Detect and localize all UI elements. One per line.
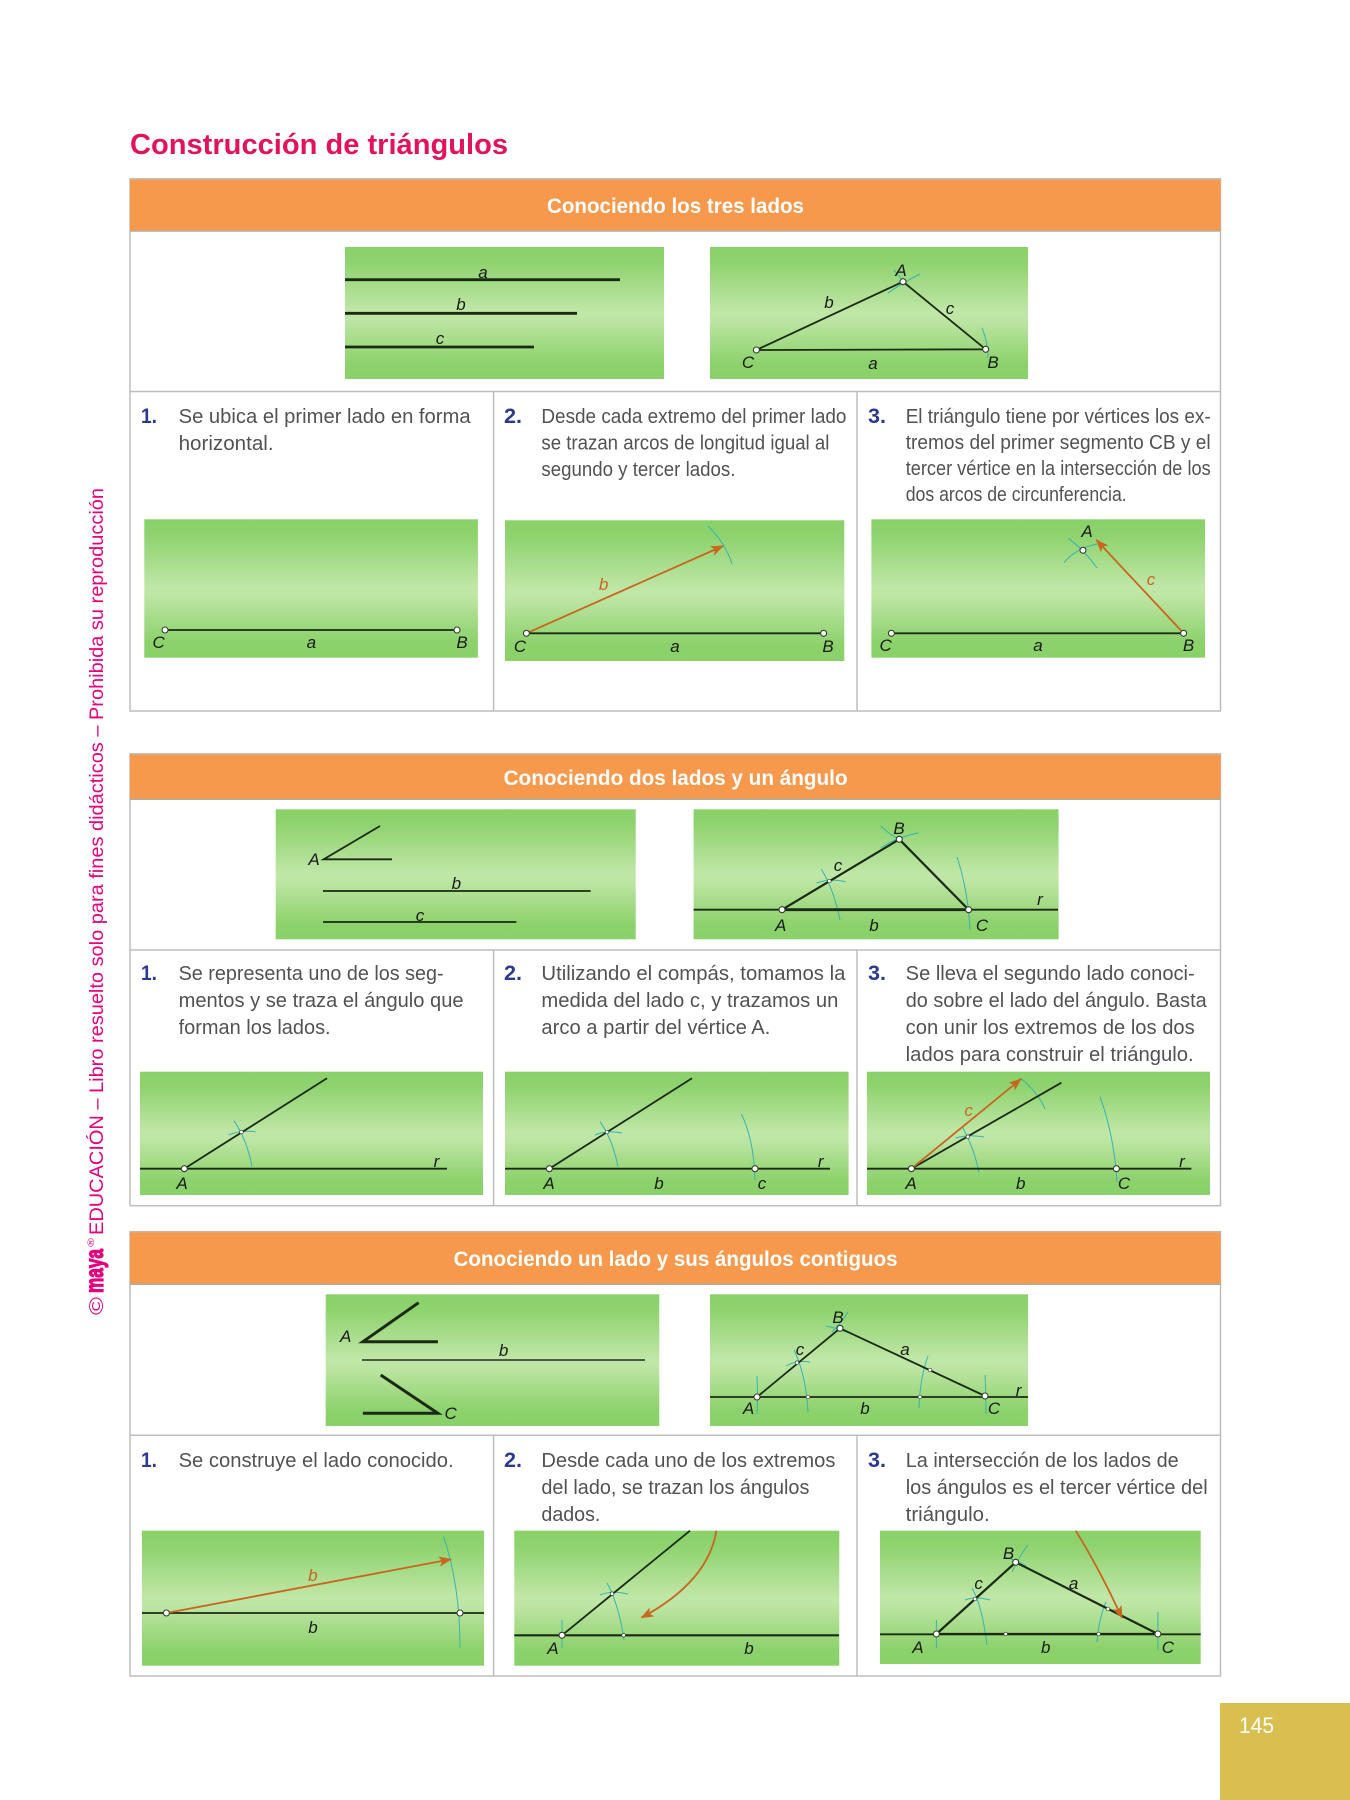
diagram: finished triangle: C xyxy=(742,353,755,372)
diagram: step 1 known side: b xyxy=(308,1618,318,1637)
diagram: step 2 arc from vertex A xyxy=(505,1072,849,1195)
sidebar: copyright text: © xyxy=(87,1297,108,1315)
step 1 text: Se representa uno de los seg- xyxy=(179,963,444,985)
diagram: finished triangle from angles: a xyxy=(900,1340,910,1359)
diagram: finished triangle from angles: c xyxy=(796,1340,805,1359)
heading: conociendo un lado y sus angulos contiguos: Conociendo un lado y sus ángulos contiguos xyxy=(454,1248,898,1271)
diagram: data angle and segments: b xyxy=(452,874,461,893)
diagram: step 3 intersecting arcs xyxy=(871,519,1205,658)
sidebar: copyright text: maya xyxy=(81,1248,109,1293)
diagram: step 3 intersection vertex: c xyxy=(974,1574,983,1593)
step 1 text: forman los lados. xyxy=(179,1017,331,1039)
step 2 text: Desde cada extremo del primer lado xyxy=(541,406,846,428)
step 3 text: con unir los extremos de los dos xyxy=(906,1017,1195,1039)
step 1 text: 1. xyxy=(141,405,157,428)
step 2 text: del lado, se trazan los ángulos xyxy=(541,1477,809,1499)
heading: conociendo los tres lados: Conociendo los tres lados xyxy=(547,195,804,218)
diagram: step 3 intersection vertex: a xyxy=(1069,1574,1078,1593)
diagram: finished triangle: b xyxy=(824,293,834,312)
diagram: step 3 intersecting arcs: c xyxy=(1147,570,1156,589)
diagram: finished triangle ABC: A xyxy=(774,916,786,935)
diagram: step 2 angles traced: b xyxy=(744,1639,754,1658)
page number block: 145 xyxy=(1239,1713,1274,1738)
diagram: data side and angles xyxy=(326,1294,659,1426)
diagram: step 3 second side carried: b xyxy=(1016,1174,1025,1193)
page number block xyxy=(1220,1703,1350,1800)
step 2 text: 2. xyxy=(504,1449,522,1472)
step 1 text: Se construye el lado conocido. xyxy=(179,1450,454,1472)
diagram: step 2 arc with side b: B xyxy=(822,637,834,656)
diagram: step 3 second side carried xyxy=(867,1072,1210,1195)
diagram: data segments a b c: b xyxy=(456,295,466,314)
diagram: step 3 intersection vertex: A xyxy=(911,1638,924,1657)
step 1 text: 1. xyxy=(141,1449,157,1472)
diagram: data angle and segments: c xyxy=(416,906,425,925)
step 3 text: 3. xyxy=(868,962,886,985)
diagram: finished triangle: B xyxy=(987,353,999,372)
heading: conociendo dos lados y un angulo xyxy=(130,754,1220,799)
step 2 text: se trazan arcos de longitud igual al xyxy=(541,432,829,454)
panel frame 1 xyxy=(130,179,1220,711)
diagram: data angle and segments: A xyxy=(307,850,320,869)
panel: conociendo los tres lados xyxy=(130,179,1220,711)
heading: conociendo los tres lados xyxy=(130,179,1220,231)
diagram: finished triangle ABC: b xyxy=(869,916,879,935)
diagram: step 3 intersection vertex: B xyxy=(1003,1544,1014,1563)
diagram: step 2 arc with side b: b xyxy=(599,575,608,594)
diagram: step 3 intersection vertex: b xyxy=(1041,1638,1050,1657)
diagram: finished triangle ABC: c xyxy=(834,856,843,875)
step 1 text: Se ubica el primer lado en forma xyxy=(179,406,471,428)
diagram: data segments a b c: c xyxy=(436,329,445,348)
step 3 text xyxy=(868,962,1208,1066)
step 3 text: tercer vértice en la intersección de los xyxy=(906,458,1211,480)
sidebar: copyright text: ® xyxy=(86,1238,96,1247)
diagram: finished triangle: A xyxy=(894,261,907,280)
diagram: finished triangle: c xyxy=(946,299,955,318)
diagram: step 1 angle on line r xyxy=(140,1072,483,1195)
diagram: step 2 arc from vertex A: c xyxy=(758,1174,767,1193)
diagram: step 2 arc with side b xyxy=(505,520,844,661)
step 2 text: medida del lado c, y trazamos un xyxy=(541,990,838,1012)
diagram: data segments a b c: a xyxy=(478,263,488,282)
diagram: data angle and segments xyxy=(276,809,636,939)
diagram: finished triangle from angles xyxy=(710,1294,1028,1426)
step 1 text: 1. xyxy=(141,962,157,985)
step 2 text: segundo y tercer lados. xyxy=(541,459,735,481)
diagram: step 1 horizontal side: B xyxy=(456,633,468,652)
step 3 text: lados para construir el triángulo. xyxy=(906,1044,1194,1066)
diagram: step 1 known side xyxy=(142,1531,484,1666)
step 1 text xyxy=(141,962,464,1039)
diagram: step 3 intersecting arcs: A xyxy=(1080,522,1093,541)
step 3 text: do sobre el lado del ángulo. Basta xyxy=(906,990,1208,1012)
diagram: step 3 second side carried: c xyxy=(964,1101,973,1120)
diagram: step 2 angles traced: A xyxy=(546,1639,559,1658)
step 3 text: tremos del primer segmento CB y el xyxy=(906,432,1211,454)
diagram: finished triangle from angles: r xyxy=(1016,1381,1023,1400)
diagram: step 3 intersecting arcs: C xyxy=(880,636,893,655)
step 2 text: Utilizando el compás, tomamos la xyxy=(541,963,846,985)
step 2 text: dados. xyxy=(541,1504,600,1526)
diagram: finished triangle from angles: B xyxy=(832,1308,844,1327)
step 2 text: 2. xyxy=(504,405,522,428)
diagram: step 2 angles traced xyxy=(514,1531,839,1666)
panel: conociendo un lado y sus angulos contiguos xyxy=(130,1232,1220,1676)
diagram: finished triangle ABC: B xyxy=(893,819,905,838)
diagram: data side and angles: C xyxy=(445,1404,458,1423)
step 3 text: 3. xyxy=(868,1449,886,1472)
diagram: step 1 horizontal side: C xyxy=(152,633,165,652)
diagram: step 1 horizontal side xyxy=(144,519,478,658)
diagram: step 3 second side carried: A xyxy=(904,1174,917,1193)
panel frame 2 xyxy=(130,754,1220,1206)
step 2 text: Desde cada uno de los extremos xyxy=(541,1450,835,1472)
diagram: data side and angles: b xyxy=(499,1341,508,1360)
sidebar: copyright text: EDUCACIÓN – Libro resuelto solo para fines didácticos – Prohibida su reproducción xyxy=(86,488,108,1235)
step 3 text: dos arcos de circunferencia. xyxy=(906,484,1127,506)
diagram: step 3 second side carried: C xyxy=(1118,1174,1131,1193)
diagram: finished triangle: a xyxy=(868,354,878,373)
heading: conociendo dos lados y un angulo: Conociendo dos lados y un ángulo xyxy=(504,767,848,790)
panel frame 3 xyxy=(130,1232,1220,1676)
diagram: step 1 angle on line r: r xyxy=(434,1152,441,1171)
step 3 text xyxy=(868,405,1211,506)
diagram: finished triangle ABC: r xyxy=(1037,890,1044,909)
step 2 text: arco a partir del vértice A. xyxy=(541,1017,770,1039)
diagram: step 1 angle on line r: A xyxy=(175,1174,188,1193)
step 2 text xyxy=(504,1449,835,1526)
step 1 text: mentos y se traza el ángulo que xyxy=(179,990,464,1012)
diagram: data side and angles: A xyxy=(339,1327,351,1346)
panel: conociendo dos lados y un angulo xyxy=(130,754,1220,1206)
diagram: step 2 arc from vertex A: A xyxy=(542,1174,555,1193)
diagram: finished triangle xyxy=(710,247,1028,379)
step 2 text xyxy=(504,962,846,1039)
step 1 text xyxy=(141,405,471,455)
diagram: finished triangle from angles: b xyxy=(860,1399,870,1418)
diagram: step 3 intersection vertex xyxy=(880,1531,1201,1664)
step 2 text: 2. xyxy=(504,962,522,985)
title: Construcción de triángulos xyxy=(130,129,508,161)
heading: conociendo un lado y sus angulos contiguos xyxy=(130,1232,1220,1284)
step 2 text xyxy=(504,405,846,481)
step 3 text: La intersección de los lados de xyxy=(906,1450,1179,1472)
diagram: step 2 arc with side b: C xyxy=(514,637,527,656)
diagram: step 3 intersection vertex: C xyxy=(1162,1638,1175,1657)
diagram: data segments a b c xyxy=(345,247,664,379)
sidebar: copyright text xyxy=(81,488,109,1315)
diagram: finished triangle from angles: A xyxy=(742,1399,754,1418)
step 3 text: los ángulos es el tercer vértice del xyxy=(906,1477,1208,1499)
diagram: finished triangle from angles: C xyxy=(988,1399,1001,1418)
diagram: step 3 second side carried: r xyxy=(1179,1152,1186,1171)
diagram: step 3 intersecting arcs: a xyxy=(1033,636,1043,655)
diagram: step 2 arc with side b: a xyxy=(670,637,680,656)
step 1 text: horizontal. xyxy=(179,433,274,455)
diagram: step 2 arc from vertex A: r xyxy=(818,1152,825,1171)
step 3 text: El triángulo tiene por vértices los ex- xyxy=(906,406,1211,428)
diagram: step 1 known side: b xyxy=(308,1566,318,1585)
step 3 text: 3. xyxy=(868,405,886,428)
diagram: step 3 intersecting arcs: B xyxy=(1183,636,1194,655)
diagram: step 1 horizontal side: a xyxy=(307,633,316,652)
diagram: step 2 arc from vertex A: b xyxy=(654,1174,664,1193)
step 3 text: Se lleva el segundo lado conoci- xyxy=(906,963,1195,985)
diagram: finished triangle ABC xyxy=(694,809,1059,939)
step 3 text: triángulo. xyxy=(906,1504,990,1526)
diagram: finished triangle ABC: C xyxy=(976,916,989,935)
step 3 text xyxy=(868,1449,1208,1526)
